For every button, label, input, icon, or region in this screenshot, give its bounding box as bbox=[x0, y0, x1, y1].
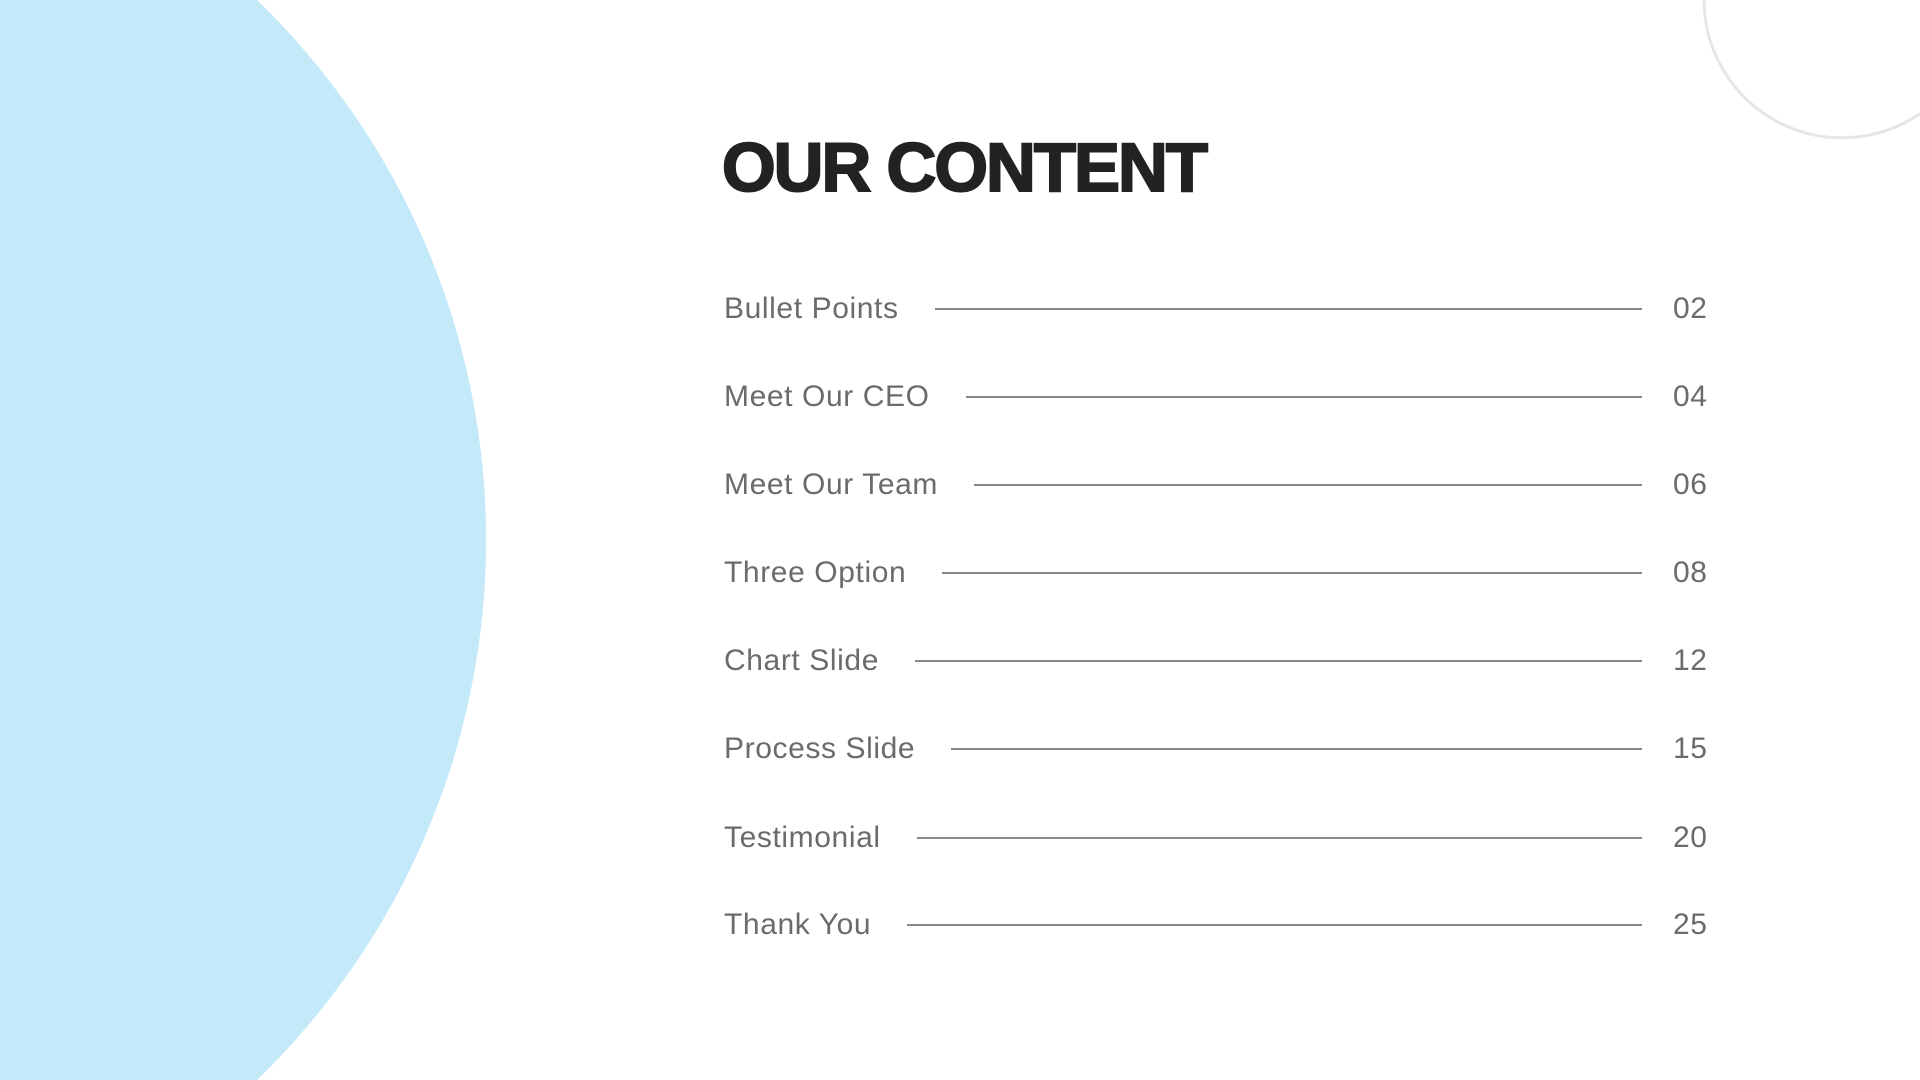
item: Testimonial bbox=[724, 821, 1708, 854]
item: Meet Our CEO bbox=[724, 380, 1708, 413]
decorative big circle bbox=[0, 0, 486, 1080]
item: Bullet Points bbox=[724, 292, 1708, 325]
item: Chart Slide bbox=[724, 644, 1708, 677]
item: Process Slide: Process Slide bbox=[724, 732, 915, 765]
item: Meet Our Team: 06 bbox=[1673, 468, 1708, 501]
item: Thank You: 25 bbox=[1673, 908, 1708, 941]
item: Meet Our CEO: 04 bbox=[1673, 380, 1708, 413]
item: Three Option: Three Option bbox=[724, 556, 906, 589]
item: Chart Slide: Chart Slide bbox=[724, 644, 879, 677]
item: Thank You bbox=[724, 908, 1708, 941]
decorative ring bbox=[1704, 0, 1920, 138]
item: Bullet Points: 02 bbox=[1673, 292, 1708, 325]
item: Meet Our CEO: Meet Our CEO bbox=[724, 380, 930, 413]
item: Thank You: Thank You bbox=[724, 908, 871, 941]
item: Testimonial: Testimonial bbox=[724, 821, 881, 854]
item: Process Slide: 15 bbox=[1673, 732, 1708, 765]
item: Three Option bbox=[724, 556, 1708, 589]
title: OUR CONTENT bbox=[722, 129, 1206, 206]
item: Meet Our Team: Meet Our Team bbox=[724, 468, 938, 501]
item: Process Slide bbox=[724, 732, 1708, 765]
item: Chart Slide: 12 bbox=[1673, 644, 1708, 677]
item: Bullet Points: Bullet Points bbox=[724, 292, 899, 325]
item: Meet Our Team bbox=[724, 468, 1708, 501]
item: Three Option: 08 bbox=[1673, 556, 1708, 589]
item: Testimonial: 20 bbox=[1673, 821, 1708, 854]
